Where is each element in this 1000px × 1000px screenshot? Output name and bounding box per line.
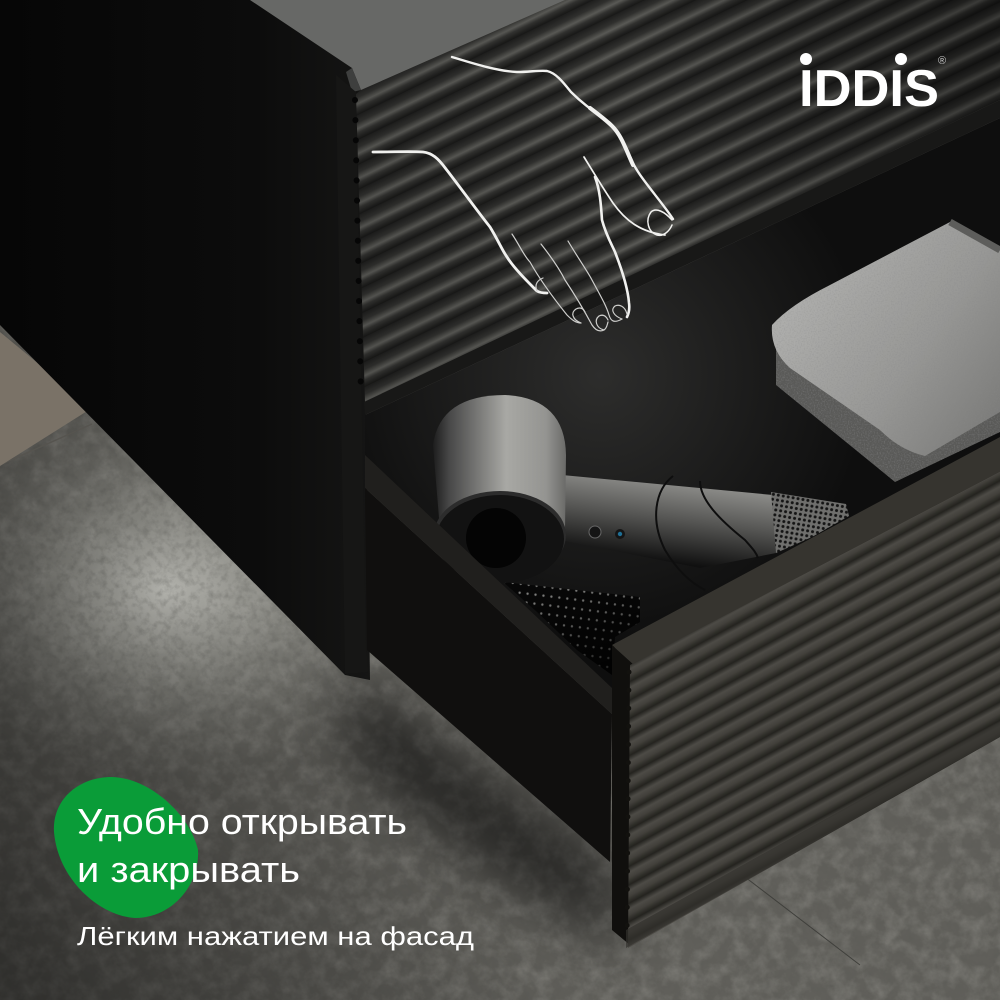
hand outline illustration xyxy=(373,57,673,331)
ring finger xyxy=(541,244,608,331)
dryer body cylinder xyxy=(433,395,566,530)
heading: и закрывать xyxy=(77,849,300,890)
heading xyxy=(77,801,407,890)
dryer front ring rim xyxy=(434,491,566,579)
background wall corner xyxy=(0,332,92,466)
dryer hole xyxy=(466,508,526,568)
subheading: Лёгким нажатием на фасад xyxy=(77,921,474,951)
top of hand contour xyxy=(452,57,673,219)
dryer buttons xyxy=(589,526,625,539)
upper drawer facade with ridges xyxy=(355,0,1000,415)
countertop xyxy=(250,0,565,92)
index finger contour xyxy=(595,177,629,317)
hair brush xyxy=(503,582,640,675)
logo IDDIS: IDDIS xyxy=(799,60,939,118)
lower hand contour xyxy=(373,152,547,293)
dryer front face xyxy=(436,495,564,583)
dryer cord xyxy=(656,476,758,590)
drawer left side wall xyxy=(365,455,612,862)
little finger xyxy=(512,234,581,323)
dryer handle xyxy=(560,475,776,568)
thumb underside xyxy=(584,157,665,235)
drawer interior xyxy=(365,118,1000,690)
hair dryer xyxy=(433,395,849,590)
dryer nozzle mesh xyxy=(771,492,849,553)
green blob accent xyxy=(54,777,198,918)
finger nails xyxy=(536,278,627,330)
logo IDDIS: ® xyxy=(938,55,946,67)
towel xyxy=(772,222,1000,482)
drawer front facade xyxy=(612,437,1000,948)
cabinet corner strip xyxy=(336,75,368,674)
thumb nail xyxy=(648,210,672,235)
middle finger xyxy=(568,241,622,321)
top of hand thick section xyxy=(590,108,633,165)
cabinet side panel xyxy=(0,0,370,680)
heading: Удобно открывать xyxy=(77,801,407,842)
